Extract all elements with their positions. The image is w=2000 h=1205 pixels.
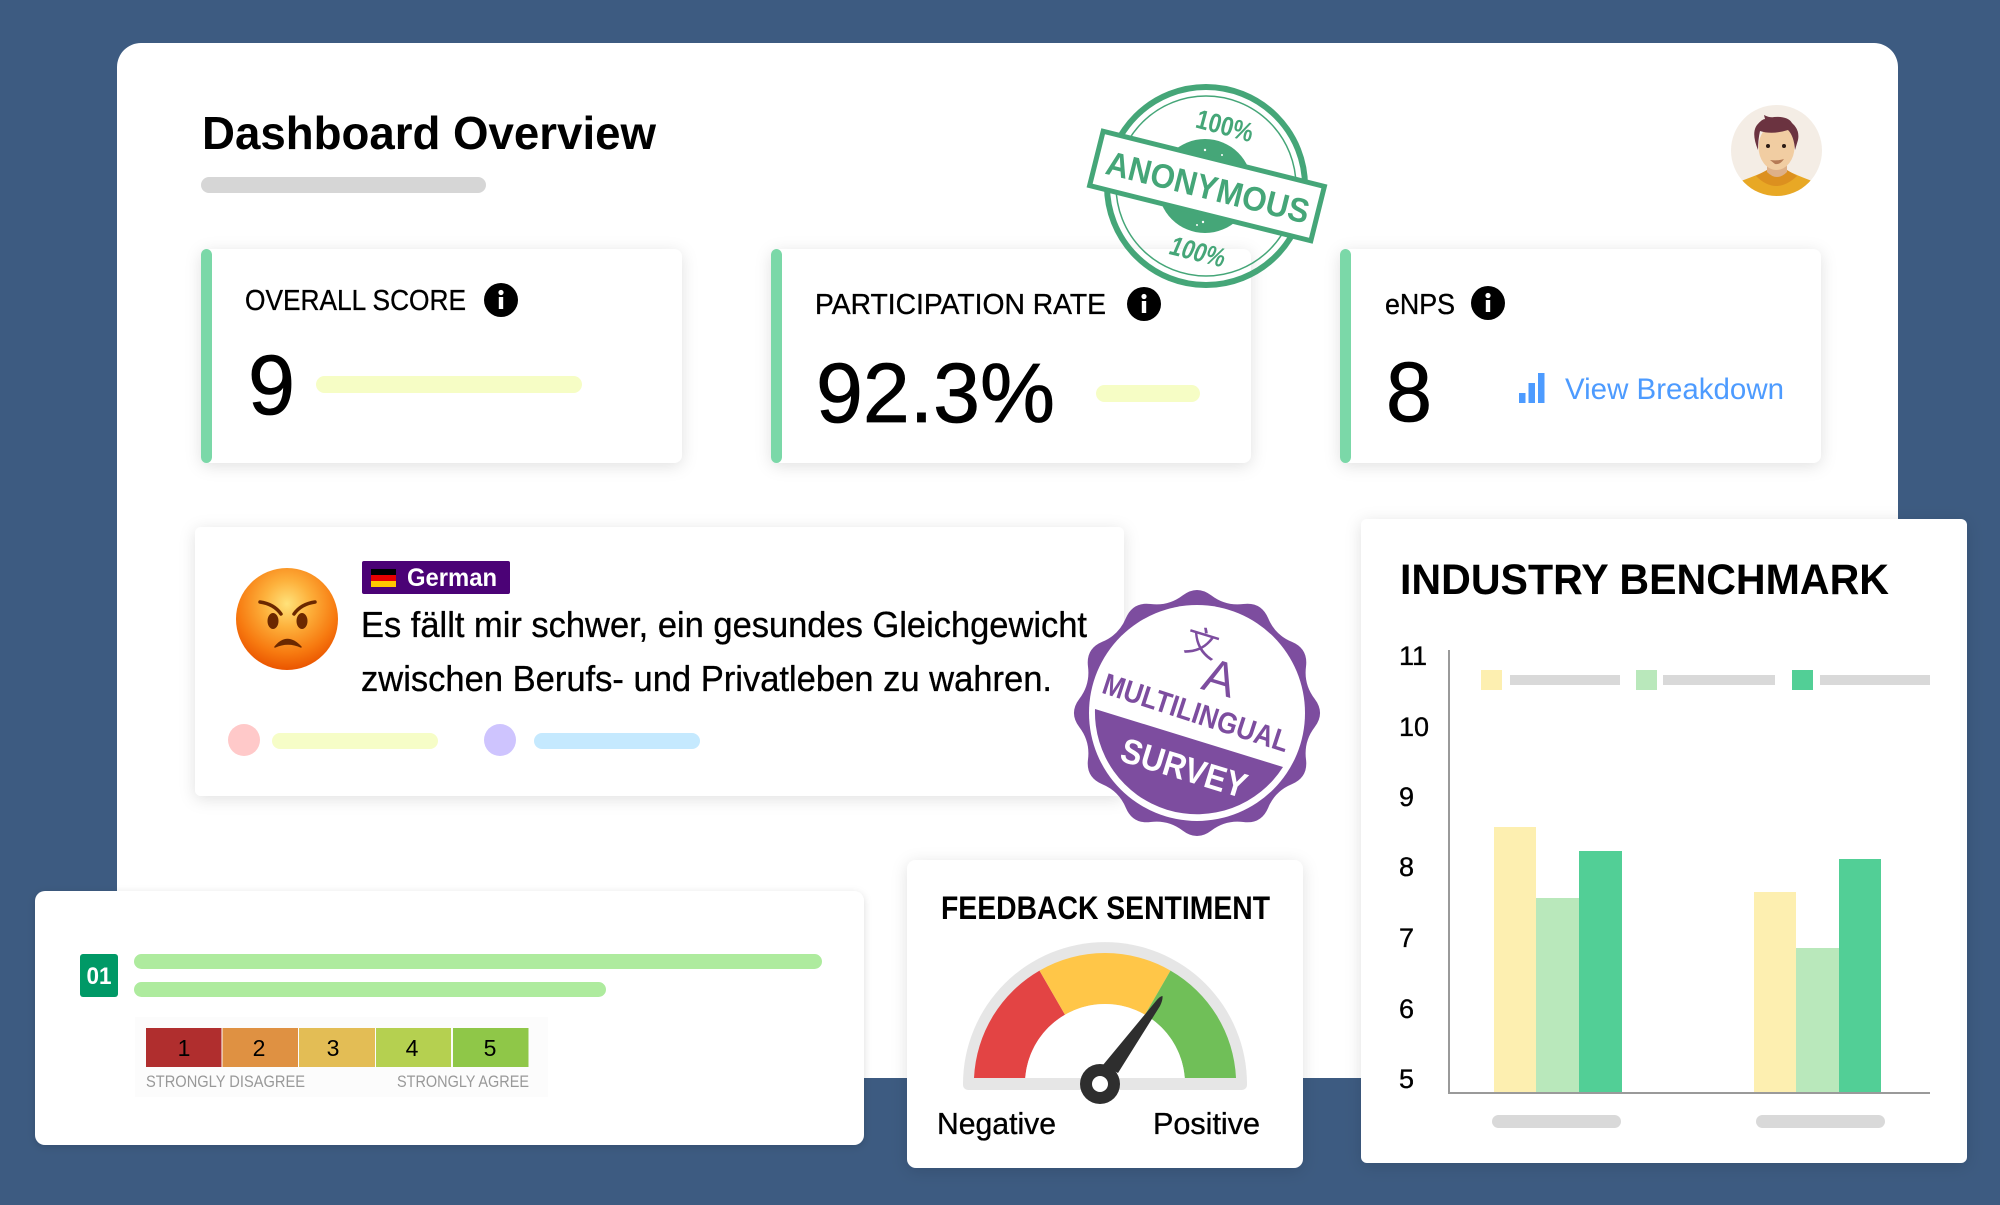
gauge <box>963 942 1247 1104</box>
stamp: 100% anonymous: ANONYMOUS <box>1102 144 1313 232</box>
likert scale: 3 <box>327 1035 339 1061</box>
likert scale: STRONGLY AGREE <box>397 1072 529 1091</box>
language tag: German: German <box>407 564 497 592</box>
stamp: multilingual survey: MULTILINGUAL <box>1098 668 1293 759</box>
legend <box>1481 670 1930 690</box>
panel: likert question <box>35 891 864 1145</box>
value: 8 <box>1386 345 1432 439</box>
likert scale: 5 <box>484 1035 496 1061</box>
stamp: multilingual survey: SURVEY <box>1116 731 1252 806</box>
question placeholder lines <box>134 954 822 997</box>
label: OVERALL SCORE <box>245 285 466 317</box>
likert scale: 2 <box>253 1035 265 1061</box>
label: PARTICIPATION RATE <box>815 289 1106 321</box>
title underline placeholder <box>201 177 486 193</box>
icon: info <box>1127 287 1161 321</box>
value: 92.3% <box>816 346 1055 440</box>
stamp: 100% anonymous: 100% <box>1193 104 1257 148</box>
value: 9 <box>248 338 295 432</box>
panel: feedback sentiment <box>907 860 1303 1168</box>
icon: user avatar <box>1731 105 1822 200</box>
stamp: multilingual survey: 文 <box>1180 613 1225 669</box>
card accent <box>771 249 782 463</box>
stamp: multilingual survey <box>1074 590 1320 836</box>
title: Dashboard Overview <box>202 107 656 159</box>
card: overall score <box>201 249 682 463</box>
gauge needle <box>1080 996 1163 1104</box>
placeholder metadata <box>228 724 700 756</box>
language tag: German <box>362 561 510 594</box>
x axis placeholders <box>1492 1115 1885 1128</box>
stamp: multilingual survey: A <box>1197 648 1243 708</box>
icon: info <box>1471 286 1505 320</box>
y axis labels: 8 <box>1399 852 1414 882</box>
panel: industry benchmark <box>1361 519 1967 1163</box>
y axis labels <box>1399 641 1429 1094</box>
panel: main dashboard <box>117 43 1898 1078</box>
y axis labels: 7 <box>1399 923 1414 953</box>
icon: info <box>484 283 518 317</box>
gauge labels: Negative <box>937 1106 1056 1141</box>
rate bar <box>1096 385 1200 402</box>
bar chart <box>1449 650 1930 1093</box>
number tag: 01 <box>86 963 112 990</box>
comment text: zwischen Berufs- und Privatleben zu wahren. <box>361 658 1052 699</box>
likert scale <box>135 1017 548 1097</box>
y axis labels: 6 <box>1399 994 1414 1024</box>
card accent <box>1340 249 1351 463</box>
number tag <box>80 954 118 997</box>
likert scale: 4 <box>406 1035 419 1061</box>
likert scale: STRONGLY DISAGREE <box>146 1072 305 1091</box>
comment text <box>361 604 1087 699</box>
card accent <box>201 249 212 463</box>
score bar <box>316 376 582 393</box>
gauge labels: Positive <box>1153 1106 1260 1141</box>
likert scale: 1 <box>178 1035 190 1061</box>
card: eNPS <box>1340 249 1821 463</box>
stamp: 100% anonymous: 100% <box>1167 231 1229 273</box>
link: view breakdown: View Breakdown <box>1565 373 1784 406</box>
gauge labels <box>937 1106 1260 1141</box>
card: participation rate <box>771 249 1251 463</box>
heading: FEEDBACK SENTIMENT <box>941 890 1270 926</box>
panel: German comment <box>195 527 1124 796</box>
y axis labels: 9 <box>1399 782 1414 812</box>
stamp: 100% anonymous <box>1090 87 1324 285</box>
icon: bar chart <box>1519 373 1544 403</box>
y axis labels: 5 <box>1399 1064 1414 1094</box>
comment text: Es fällt mir schwer, ein gesundes Gleichgewicht <box>361 604 1087 645</box>
heading: INDUSTRY BENCHMARK <box>1400 556 1889 604</box>
y axis labels: 10 <box>1399 712 1429 742</box>
icon: angry emoji <box>236 568 338 670</box>
y axis labels: 11 <box>1399 641 1427 671</box>
label: eNPS <box>1385 289 1455 321</box>
